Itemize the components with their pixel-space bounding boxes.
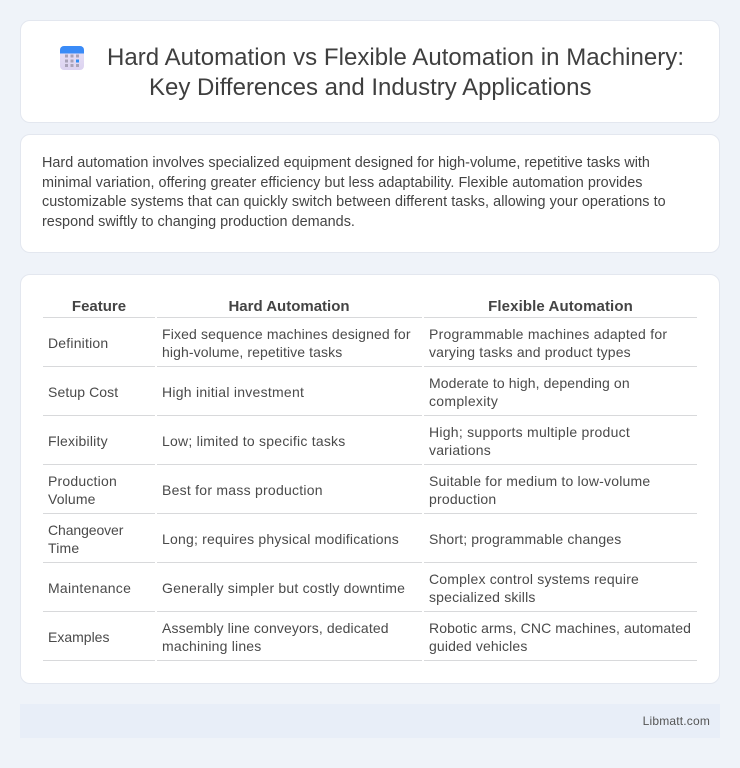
text: complexity — [429, 393, 498, 409]
table row: Production Volume — [43, 473, 697, 514]
text: varying tasks and product types — [429, 344, 631, 360]
table row: Flexibility — [43, 424, 697, 465]
text: Robotic arms, CNC machines, automated — [429, 620, 691, 636]
title: Hard Automation vs Flexible Automation in Machinery: — [107, 44, 684, 71]
text: Setup Cost — [48, 384, 118, 400]
text: Best for mass production — [162, 482, 323, 498]
text: variations — [429, 442, 491, 458]
text: Fixed sequence machines designed for — [162, 326, 411, 342]
text: Examples — [48, 629, 109, 645]
table header — [43, 298, 697, 318]
text block: introduction: minimal variation, offering greater efficiency but less adaptability. Flexible automation provides — [42, 175, 642, 191]
text: Volume — [48, 491, 96, 507]
text: Low; limited to specific tasks — [162, 433, 346, 449]
panel: comparison table — [20, 274, 720, 684]
text: Complex control systems require — [429, 571, 639, 587]
text: High initial investment — [162, 384, 304, 400]
text: Programmable machines adapted for — [429, 326, 667, 342]
text: Short; programmable changes — [429, 531, 621, 547]
text: production — [429, 491, 496, 507]
text: High; supports multiple product — [429, 424, 630, 440]
text: Suitable for medium to low-volume — [429, 473, 650, 489]
footer text: Libmatt.com: Libmatt.com — [643, 714, 710, 728]
table row: Changeover Time — [43, 522, 697, 563]
text: Production — [48, 473, 117, 489]
text: Feature — [72, 298, 126, 315]
table row: Definition — [43, 326, 697, 367]
text block: introduction: customizable systems that can quickly switch between different tasks, allowing your operations to — [42, 194, 666, 210]
title: Key Differences and Industry Applications — [149, 74, 591, 101]
text block: introduction: Hard automation involves specialized equipment designed for high-volume, repetitive tasks with — [42, 155, 650, 171]
text block: introduction: respond swiftly to changing production demands. — [42, 214, 355, 230]
text: Changeover — [48, 522, 123, 538]
text: Flexibility — [48, 433, 108, 449]
text: Generally simpler but costly downtime — [162, 580, 405, 596]
text: guided vehicles — [429, 638, 527, 654]
footer bar — [20, 704, 720, 738]
icon: calendar grid — [60, 46, 84, 70]
text: Assembly line conveyors, dedicated — [162, 620, 389, 636]
text: Maintenance — [48, 580, 131, 596]
table row: Maintenance — [43, 571, 697, 612]
text: Moderate to high, depending on — [429, 375, 630, 391]
text: machining lines — [162, 638, 262, 654]
text: Time — [48, 540, 79, 556]
panel: introduction — [20, 134, 720, 253]
text: high-volume, repetitive tasks — [162, 344, 342, 360]
text: Long; requires physical modifications — [162, 531, 399, 547]
table row: Examples — [43, 620, 697, 661]
text: Hard Automation — [228, 298, 350, 315]
panel: header — [20, 20, 720, 123]
title — [107, 44, 684, 101]
text: Definition — [48, 335, 108, 351]
text block: introduction — [42, 155, 666, 230]
text: specialized skills — [429, 589, 536, 605]
text: Flexible Automation — [488, 298, 633, 315]
table row: Setup Cost — [43, 375, 697, 416]
